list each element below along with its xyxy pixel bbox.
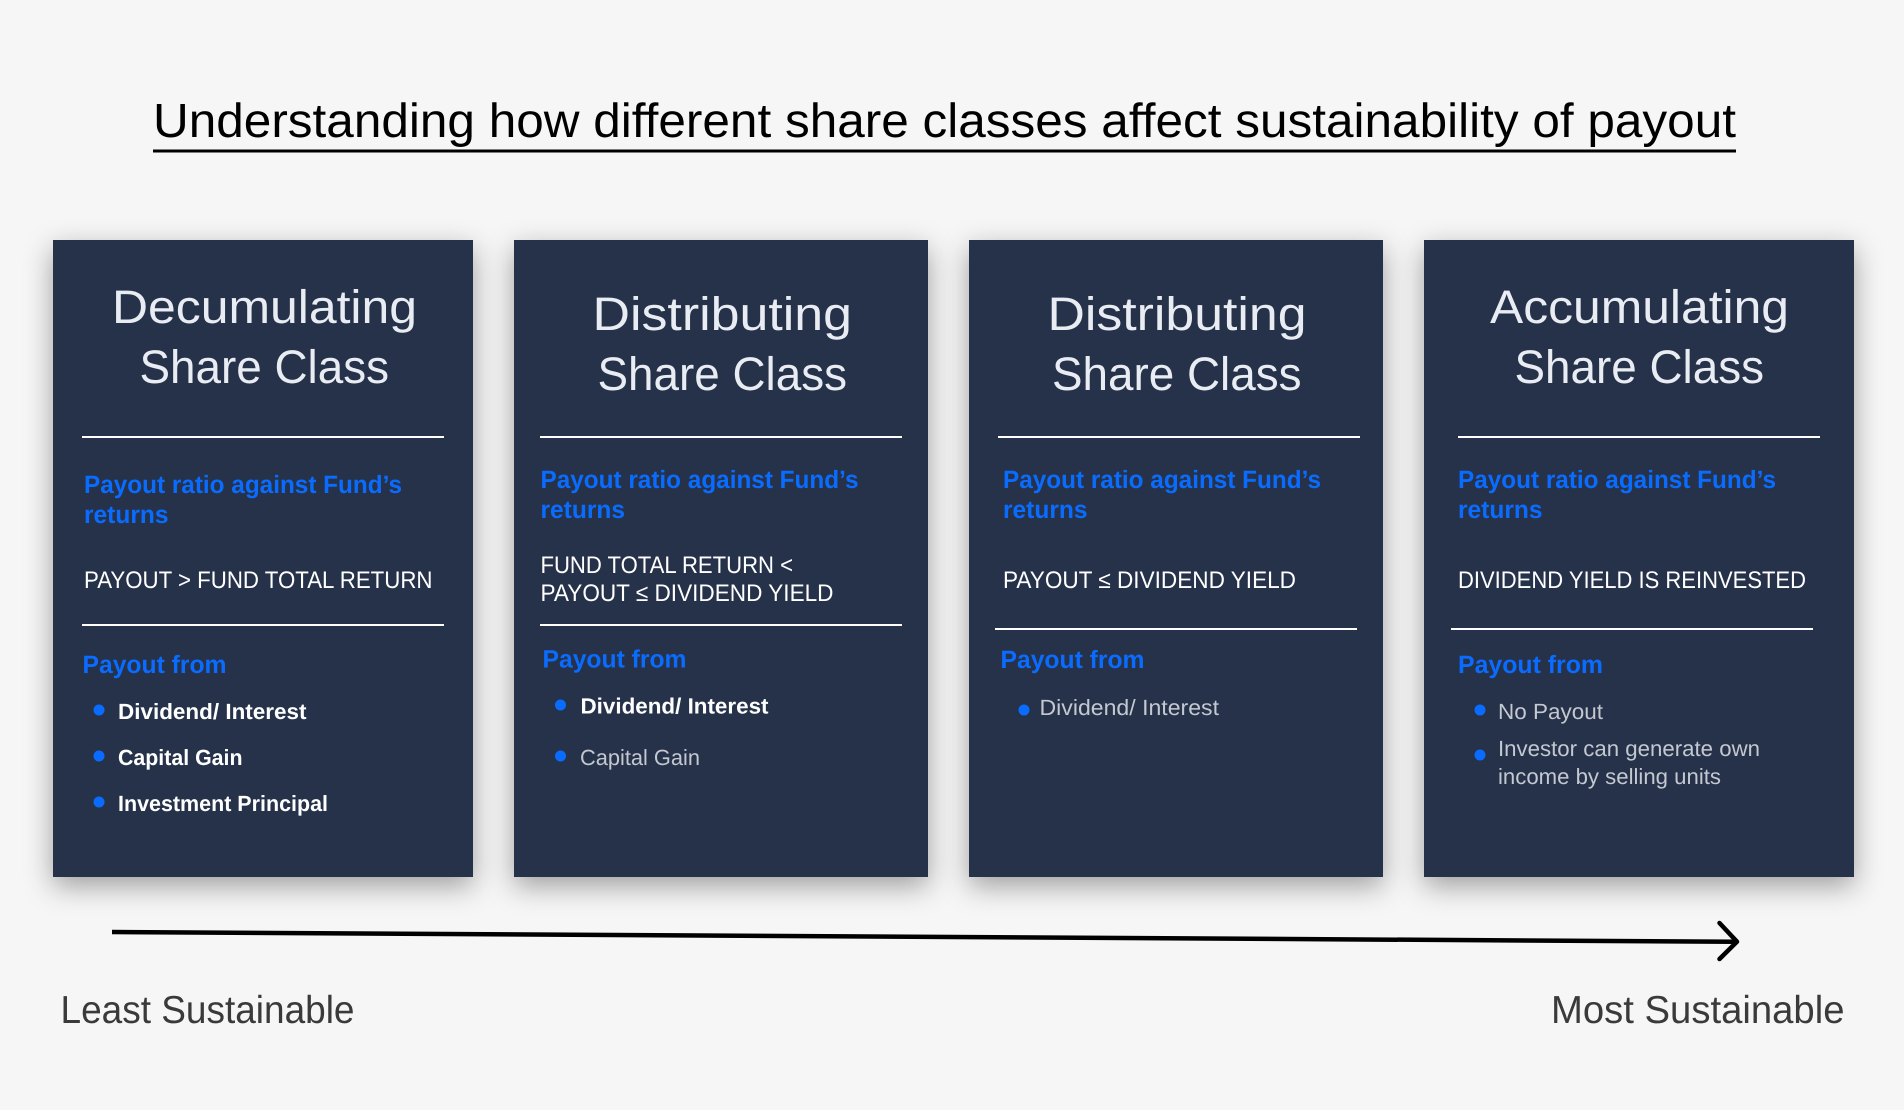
list: payout sources: Dividend/ Interest (1040, 695, 1219, 720)
list: payout sources: Dividend/ Interest (580, 694, 769, 718)
panel: distributing share class one (514, 240, 928, 877)
label: payout ratio: Payout ratio against Fund’s (1458, 466, 1776, 494)
label: payout ratio: Payout ratio against Fund’s (84, 471, 402, 499)
text: payout rule: PAYOUT ≤ DIVIDEND YIELD (540, 580, 834, 607)
heading: distributing: Share Class (1052, 347, 1302, 400)
heading: distributing (1048, 287, 1306, 400)
list: payout sources: Capital Gain (580, 745, 700, 770)
list: payout sources (555, 694, 769, 770)
heading: distributing: Share Class (598, 347, 847, 400)
heading: accumulating: Accumulating (1490, 280, 1789, 333)
text: payout rule (540, 552, 834, 607)
heading: decumulating (112, 280, 417, 393)
heading: distributing: Distributing (592, 287, 852, 340)
label: payout ratio (540, 466, 858, 524)
title: Understanding how different share classes affect sustainability of payout (153, 95, 1736, 148)
list: payout sources (1474, 699, 1760, 789)
list: payout sources: Dividend/ Interest (118, 699, 307, 724)
list: payout sources: Capital Gain (118, 745, 242, 770)
panel: accumulating share class (1424, 240, 1854, 877)
text: payout rule: DIVIDEND YIELD IS REINVESTED (1458, 567, 1806, 594)
label: payout ratio: returns (1458, 496, 1542, 524)
text: payout rule: PAYOUT > FUND TOTAL RETURN (84, 567, 432, 594)
label: payout ratio (84, 471, 402, 529)
label: payout ratio: returns (540, 496, 625, 524)
label: payout from: Payout from (1458, 651, 1603, 679)
label: payout from: Payout from (1000, 646, 1144, 674)
label: payout from: Payout from (542, 646, 686, 674)
list: payout sources: Investor can generate own (1498, 736, 1760, 761)
label: payout ratio (1003, 466, 1321, 524)
arrow: sustainability scale (112, 923, 1737, 959)
text: payout rule: PAYOUT ≤ DIVIDEND YIELD (1003, 567, 1296, 594)
heading: decumulating: Share Class (140, 340, 389, 393)
list: payout sources (94, 699, 328, 816)
list: payout sources: income by selling units (1498, 764, 1721, 789)
label: most sustainable: Most Sustainable (1551, 989, 1844, 1032)
heading: decumulating: Decumulating (112, 280, 417, 333)
label: payout ratio: returns (84, 501, 168, 529)
text: payout rule: FUND TOTAL RETURN < (540, 552, 793, 579)
heading: distributing (592, 287, 852, 400)
label: payout ratio: returns (1003, 496, 1088, 524)
list: payout sources: Investment Principal (118, 791, 328, 816)
label: payout from: Payout from (82, 651, 226, 679)
label: payout ratio (1458, 466, 1776, 524)
panel: distributing share class two (969, 240, 1383, 877)
heading: accumulating (1490, 280, 1789, 393)
list: payout sources: No Payout (1498, 699, 1603, 724)
label: payout ratio: Payout ratio against Fund’s (540, 466, 858, 494)
heading: distributing: Distributing (1048, 287, 1306, 340)
heading: accumulating: Share Class (1514, 340, 1764, 393)
panel: decumulating share class (53, 240, 473, 877)
label: least sustainable: Least Sustainable (60, 989, 354, 1032)
label: payout ratio: Payout ratio against Fund’s (1003, 466, 1321, 494)
